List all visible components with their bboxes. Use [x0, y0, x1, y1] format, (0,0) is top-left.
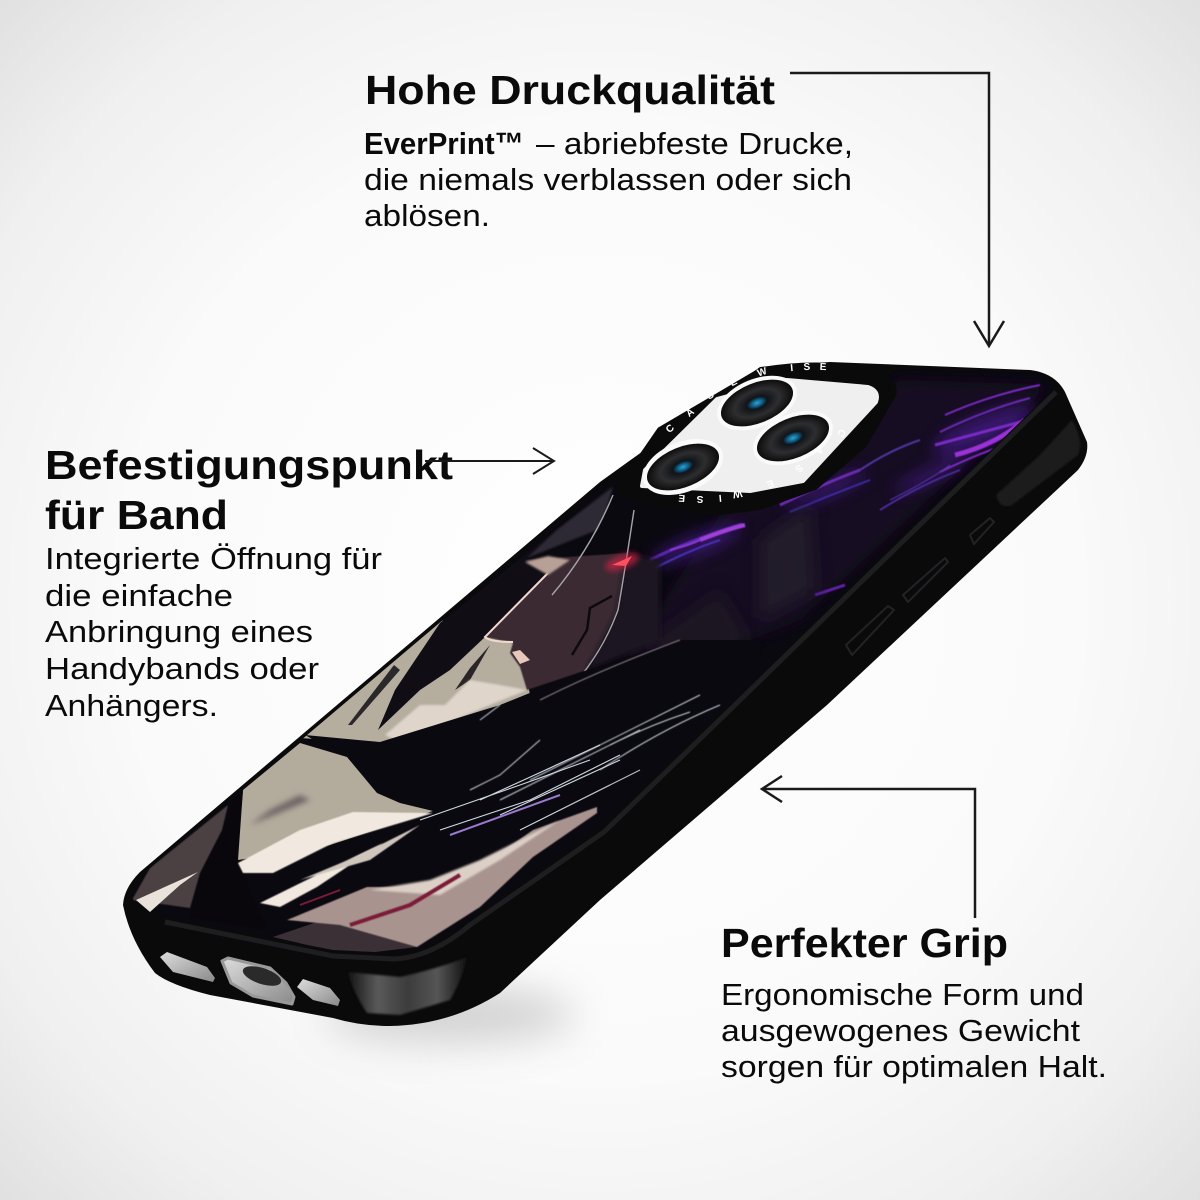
- ring lettering: S: [803, 362, 811, 373]
- glitch lines: [420, 745, 640, 835]
- ring lettering: [664, 362, 847, 504]
- body text: [45, 541, 382, 723]
- art base: [120, 360, 1070, 970]
- left speaker: [160, 952, 215, 982]
- scar: [572, 596, 612, 655]
- cloak highlight lines: [470, 640, 720, 800]
- body text: Anbringung eines: [45, 614, 313, 649]
- heading: Befestigungspunkt: [45, 442, 453, 488]
- ring lettering: W: [756, 366, 769, 379]
- ring lettering: E: [678, 492, 686, 503]
- face: [485, 553, 627, 690]
- case body: [123, 362, 1087, 1026]
- ring lettering: E: [764, 477, 775, 490]
- callout: print quality: [364, 67, 853, 233]
- ring lettering: W: [731, 487, 743, 500]
- drop shadow: [325, 987, 575, 1043]
- body text: – abriebfeste Drucke,: [536, 126, 853, 161]
- heading: Perfekter Grip: [721, 920, 1008, 966]
- right speaker: [297, 979, 340, 1006]
- lens window: [642, 380, 877, 491]
- heading: Hohe Druckqualität: [365, 67, 775, 113]
- ring lettering: C: [664, 423, 677, 436]
- heading: für Band: [45, 492, 228, 538]
- body text: die einfache: [45, 578, 233, 613]
- camera lenses: [635, 365, 841, 506]
- dark hair silhouette: [238, 790, 243, 860]
- white hair strands: [552, 494, 635, 672]
- body text: Anhängers.: [45, 688, 218, 723]
- body text: Ergonomische Form und: [721, 977, 1084, 1012]
- body text: Handybands oder: [45, 651, 319, 686]
- body text: [364, 126, 853, 233]
- ring lettering: A: [812, 443, 825, 456]
- heading: [45, 442, 453, 538]
- phone case: [120, 360, 1087, 1043]
- side grip panel: [996, 420, 1080, 506]
- body text: [721, 977, 1107, 1084]
- volume buttons: [846, 518, 994, 655]
- ring lettering: I: [718, 492, 722, 503]
- body text: ausgewogenes Gewicht: [721, 1013, 1080, 1048]
- body text: ablösen.: [364, 198, 490, 233]
- arrow: print quality: [790, 73, 1004, 346]
- ring lettering: E: [820, 362, 827, 373]
- body text: EverPrint™: [364, 126, 524, 161]
- glossy corner: [348, 957, 467, 1015]
- body text: die niemals verblassen oder sich: [364, 162, 852, 197]
- arrow: strap attachment: [425, 448, 554, 474]
- arrow: perfect grip: [762, 776, 975, 918]
- grey smudge: [250, 795, 310, 825]
- ring lettering: S: [705, 389, 717, 402]
- dark cloak: [306, 640, 754, 745]
- callout: perfect grip: [721, 920, 1107, 1084]
- corner grey panel: [132, 805, 228, 908]
- face neck shade: [587, 553, 660, 670]
- face highlight: [485, 573, 548, 642]
- back artwork: [120, 360, 1070, 970]
- lips: [512, 650, 530, 664]
- side rail highlight: [165, 392, 1056, 959]
- island frame: [620, 366, 894, 512]
- dark hair strands: [378, 483, 614, 730]
- ring lettering: S: [792, 462, 805, 474]
- upper dark violet haze: [632, 378, 1041, 655]
- ring lettering: S: [696, 493, 703, 504]
- ring lettering: I: [790, 363, 794, 374]
- lower cream shape: [238, 743, 433, 860]
- ring lettering: C: [834, 426, 847, 439]
- corner streaks: [136, 872, 198, 912]
- cream backdrop: [300, 620, 530, 745]
- purple streaks: [649, 384, 1041, 597]
- white hair streaks: [238, 812, 433, 907]
- forehead glow: [525, 556, 570, 575]
- camera island: [620, 362, 894, 512]
- violet glow: [647, 396, 1041, 572]
- rose highlights: [274, 922, 417, 952]
- bright hair bottom of face: [385, 680, 527, 742]
- bottom ports: [160, 952, 467, 1015]
- ring lettering: A: [684, 406, 697, 420]
- grey top hair band: [527, 487, 613, 558]
- usb port: [222, 958, 294, 1004]
- red eye: [603, 549, 641, 575]
- ring lettering: E: [728, 376, 740, 389]
- body text: sorgen für optimalen Halt.: [721, 1049, 1107, 1084]
- body text: Integrierte Öffnung für: [45, 541, 382, 576]
- hair folds: [760, 505, 815, 620]
- callout: strap attachment: [45, 442, 453, 723]
